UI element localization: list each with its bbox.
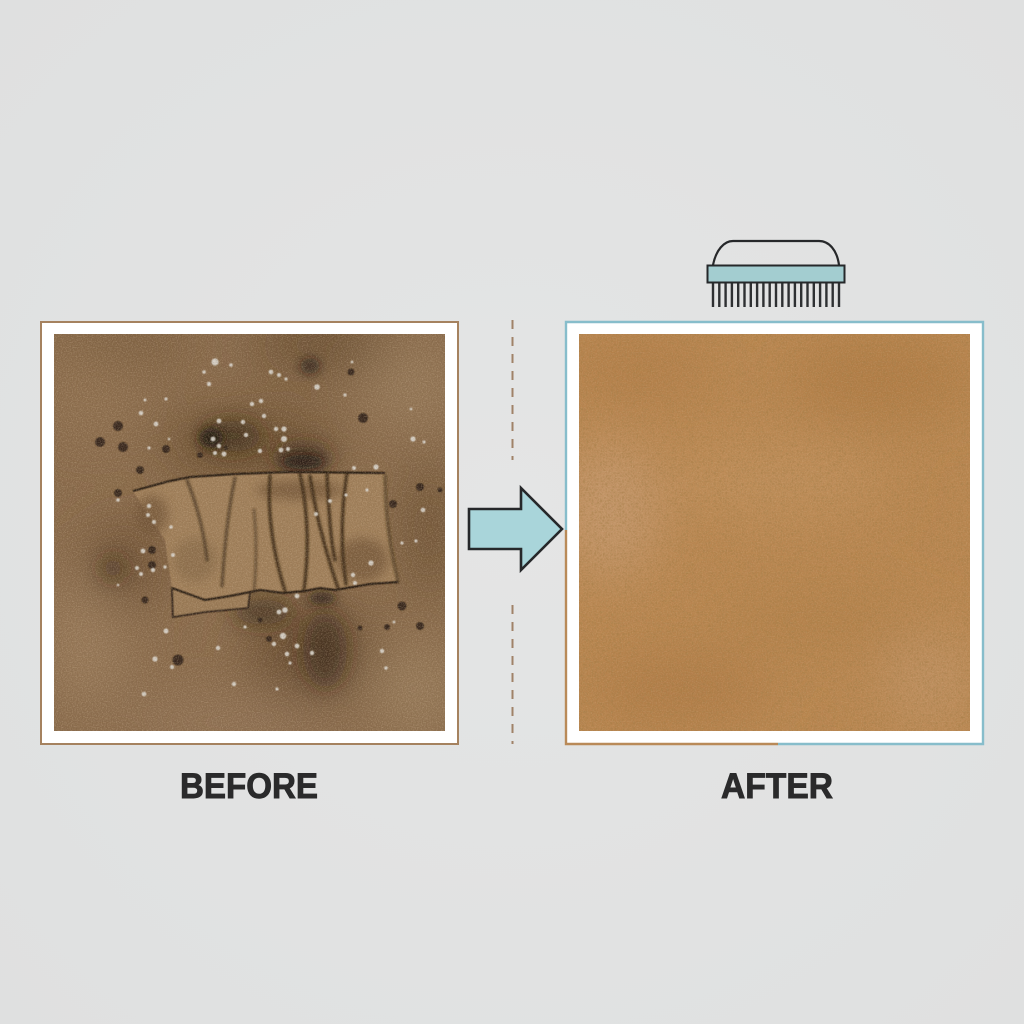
after frame bbox=[566, 322, 983, 744]
before frame bbox=[41, 322, 458, 744]
cloth patch bbox=[133, 472, 398, 617]
label: before: BEFORE bbox=[180, 767, 318, 806]
infographic canvas bbox=[40, 240, 984, 799]
divider: dashed line bbox=[512, 320, 514, 744]
white specks bbox=[116, 358, 426, 696]
brush bar bbox=[708, 266, 844, 282]
panel: after bbox=[560, 322, 983, 744]
arrow bbox=[469, 488, 562, 570]
dark soot blobs bbox=[102, 421, 347, 688]
dark specks bbox=[95, 368, 442, 666]
label: after: AFTER bbox=[721, 767, 833, 806]
panel: before bbox=[40, 322, 460, 744]
brush handle bbox=[713, 241, 839, 265]
brush bristles bbox=[713, 282, 839, 307]
after image: clean carpet bbox=[560, 334, 980, 731]
icon: brush bbox=[708, 241, 844, 307]
before image: stained carpet bbox=[54, 334, 445, 731]
